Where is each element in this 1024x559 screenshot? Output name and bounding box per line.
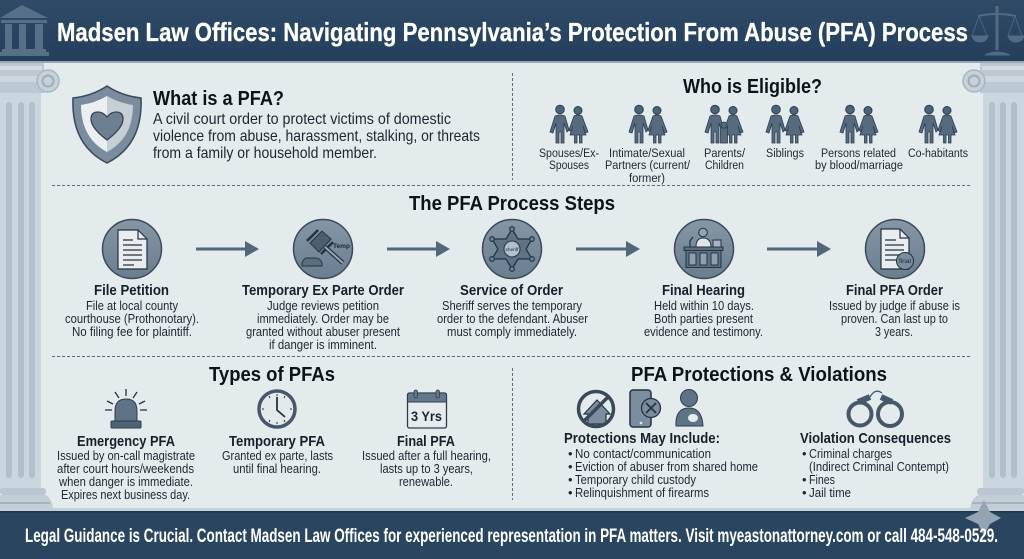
step: file petition: No filing fee for plaintiff. <box>72 324 192 339</box>
icon: courthouse <box>0 5 49 56</box>
text: PFA definition: from a family or household member. <box>153 145 377 162</box>
type: temporary PFA: Granted ex parte, lasts <box>222 448 333 463</box>
step: service of order: must comply immediately. <box>447 324 577 339</box>
icon: file petition <box>102 220 162 278</box>
step: final hearing: Held within 10 days. <box>654 298 754 313</box>
icon: sparkle <box>965 500 1001 536</box>
type: emergency PFA: after court hours/weekends <box>57 461 194 476</box>
icon: final order <box>866 220 924 278</box>
label: spouses: Spouses <box>549 158 589 172</box>
type: emergency PFA: Emergency PFA <box>77 433 175 450</box>
type: final PFA: renewable. <box>399 474 453 489</box>
step: file petition: courthouse (Prothonotary). <box>65 311 199 326</box>
icon: parent and child <box>676 390 703 426</box>
list: violation consequences: Fines <box>809 472 835 487</box>
list: violation consequences: • <box>802 485 807 500</box>
icon: court bench <box>674 220 734 278</box>
step: service of order: order to the defendant. Abuser <box>437 311 589 326</box>
list: protections may include: Eviction of abuser from shared home <box>575 459 758 474</box>
label: spouses <box>539 146 599 172</box>
label: blood relatives <box>815 146 903 172</box>
arrow <box>576 241 640 257</box>
list: violation consequences: Violation Consequences <box>800 430 951 447</box>
section dividers <box>52 73 972 500</box>
label: siblings: Siblings <box>766 146 804 160</box>
type: final PFA <box>362 433 491 489</box>
type: final PFA: Final PFA <box>397 433 455 450</box>
icon: final order: final <box>899 259 911 265</box>
icon: handcuffs <box>848 391 902 426</box>
step: temporary ex parte order: Judge reviews petition <box>267 298 379 313</box>
step: temporary ex parte order: if danger is imminent. <box>269 337 377 352</box>
icon: phone blocked <box>630 390 660 427</box>
step: final PFA order: Final PFA Order <box>846 282 943 299</box>
label: co-habitants: Co-habitants <box>908 146 968 160</box>
step: file petition: File Petition <box>94 282 169 299</box>
icon: gavel <box>294 220 352 278</box>
icon: calendar <box>408 390 446 428</box>
step: final PFA order: Issued by judge if abuse is <box>829 298 960 313</box>
left column <box>0 62 59 511</box>
type: final PFA: lasts up to 3 years, <box>380 461 473 476</box>
icon: parents and children <box>705 105 743 143</box>
icon: sheriff badge <box>482 220 542 278</box>
step: final PFA order: 3 years. <box>875 324 913 339</box>
panel: what is a PFA <box>73 86 480 163</box>
icon: gavel: Temp <box>333 243 350 250</box>
panel: who is eligible <box>539 75 968 185</box>
label: blood relatives: Persons related <box>821 146 896 160</box>
type: temporary PFA: Temporary PFA <box>229 433 325 450</box>
heading: who is eligible: Who is Eligible? <box>683 75 822 98</box>
list: protections may include: • <box>568 472 573 487</box>
footer band <box>0 508 1024 559</box>
label: parents: Children <box>705 158 744 172</box>
step: file petition <box>65 282 199 339</box>
panel: protections and violations <box>564 363 951 500</box>
heading: types of PFAs: Types of PFAs <box>209 363 335 386</box>
step: final PFA order: proven. Can last up to <box>841 311 948 326</box>
list: violation consequences: Criminal charges <box>809 446 892 461</box>
icon: partners <box>629 105 667 143</box>
icon: siren <box>105 389 147 428</box>
list: protections may include: • <box>568 485 573 500</box>
step: final hearing <box>644 282 763 339</box>
icon: co-habitants <box>919 105 957 143</box>
list: protections may include: Protections May Include: <box>564 430 720 447</box>
text: PFA definition: A civil court order to protect victims of domestic <box>153 111 451 128</box>
list: violation consequences: • <box>802 472 807 487</box>
icon: scales of justice <box>972 6 1024 55</box>
list: protections may include: No contact/communication <box>575 446 711 461</box>
label: partners <box>605 146 691 185</box>
step: final PFA order <box>829 282 960 339</box>
arrow <box>767 241 831 257</box>
step: service of order: Service of Order <box>460 282 563 299</box>
type: final PFA: Issued after a full hearing, <box>362 448 491 463</box>
icon: clock <box>259 391 295 427</box>
label: spouses: Spouses/Ex- <box>539 146 599 160</box>
type: temporary PFA: until final hearing. <box>233 461 321 476</box>
list: violation consequences <box>800 430 951 500</box>
list: protections may include: Relinquishment of firearms <box>575 485 709 500</box>
right column <box>963 62 1024 511</box>
list: protections may include <box>564 430 758 500</box>
icon: shield with heart <box>73 86 141 163</box>
step: final hearing: evidence and testimony. <box>644 324 763 339</box>
icon: siblings <box>766 105 804 143</box>
icon: spouses <box>550 105 588 143</box>
type: emergency PFA: Expires next business day. <box>61 487 190 502</box>
list: violation consequences: • <box>802 446 807 461</box>
label: partners: Intimate/Sexual <box>609 146 685 160</box>
heading: protections and violations: PFA Protections & Violations <box>631 363 887 386</box>
step: file petition: File at local county <box>86 298 178 313</box>
label: blood relatives: by blood/marriage <box>815 158 903 172</box>
heading: process steps: The PFA Process Steps <box>409 192 615 215</box>
icon: sheriff badge: sheriff <box>506 247 519 252</box>
step: service of order <box>437 282 589 339</box>
type: emergency PFA <box>57 433 195 502</box>
list: protections may include: • <box>568 459 573 474</box>
label: parents <box>704 146 746 172</box>
icon: blood relatives <box>840 105 878 143</box>
panel: types of PFAs <box>57 363 491 502</box>
icon: no home <box>578 392 614 426</box>
step: temporary ex parte order: immediately. Order may be <box>257 311 389 326</box>
arrow <box>387 241 450 257</box>
list: violation consequences: (Indirect Criminal Contempt) <box>809 459 949 474</box>
step: temporary ex parte order <box>242 282 404 352</box>
header band <box>0 0 1024 63</box>
type: temporary PFA <box>222 433 333 476</box>
icon: calendar: 3 Yrs <box>411 408 442 424</box>
list: violation consequences: Jail time <box>809 485 851 500</box>
type: emergency PFA: Issued by on-call magistrate <box>57 448 195 463</box>
step: final hearing: Both parties present <box>654 311 753 326</box>
text: PFA definition <box>153 111 480 162</box>
step: temporary ex parte order: Temporary Ex Parte Order <box>242 282 404 299</box>
panel: process steps <box>65 192 960 352</box>
heading: what is a PFA: What is a PFA? <box>153 87 284 110</box>
arrow <box>196 241 259 257</box>
step: service of order: Sheriff serves the temporary <box>442 298 582 313</box>
list: protections may include: Temporary child custody <box>575 472 696 487</box>
list: protections may include: • <box>568 446 573 461</box>
type: emergency PFA: when danger is immediate. <box>58 474 193 489</box>
text: PFA definition: violence from abuse, harassment, stalking, or threats <box>153 128 480 145</box>
label: parents: Parents/ <box>704 146 746 160</box>
step: temporary ex parte order: granted without abuser present <box>246 324 400 339</box>
label: partners: Partners (current/ <box>605 158 691 172</box>
label: partners: former) <box>629 171 665 185</box>
step: final hearing: Final Hearing <box>662 282 745 299</box>
